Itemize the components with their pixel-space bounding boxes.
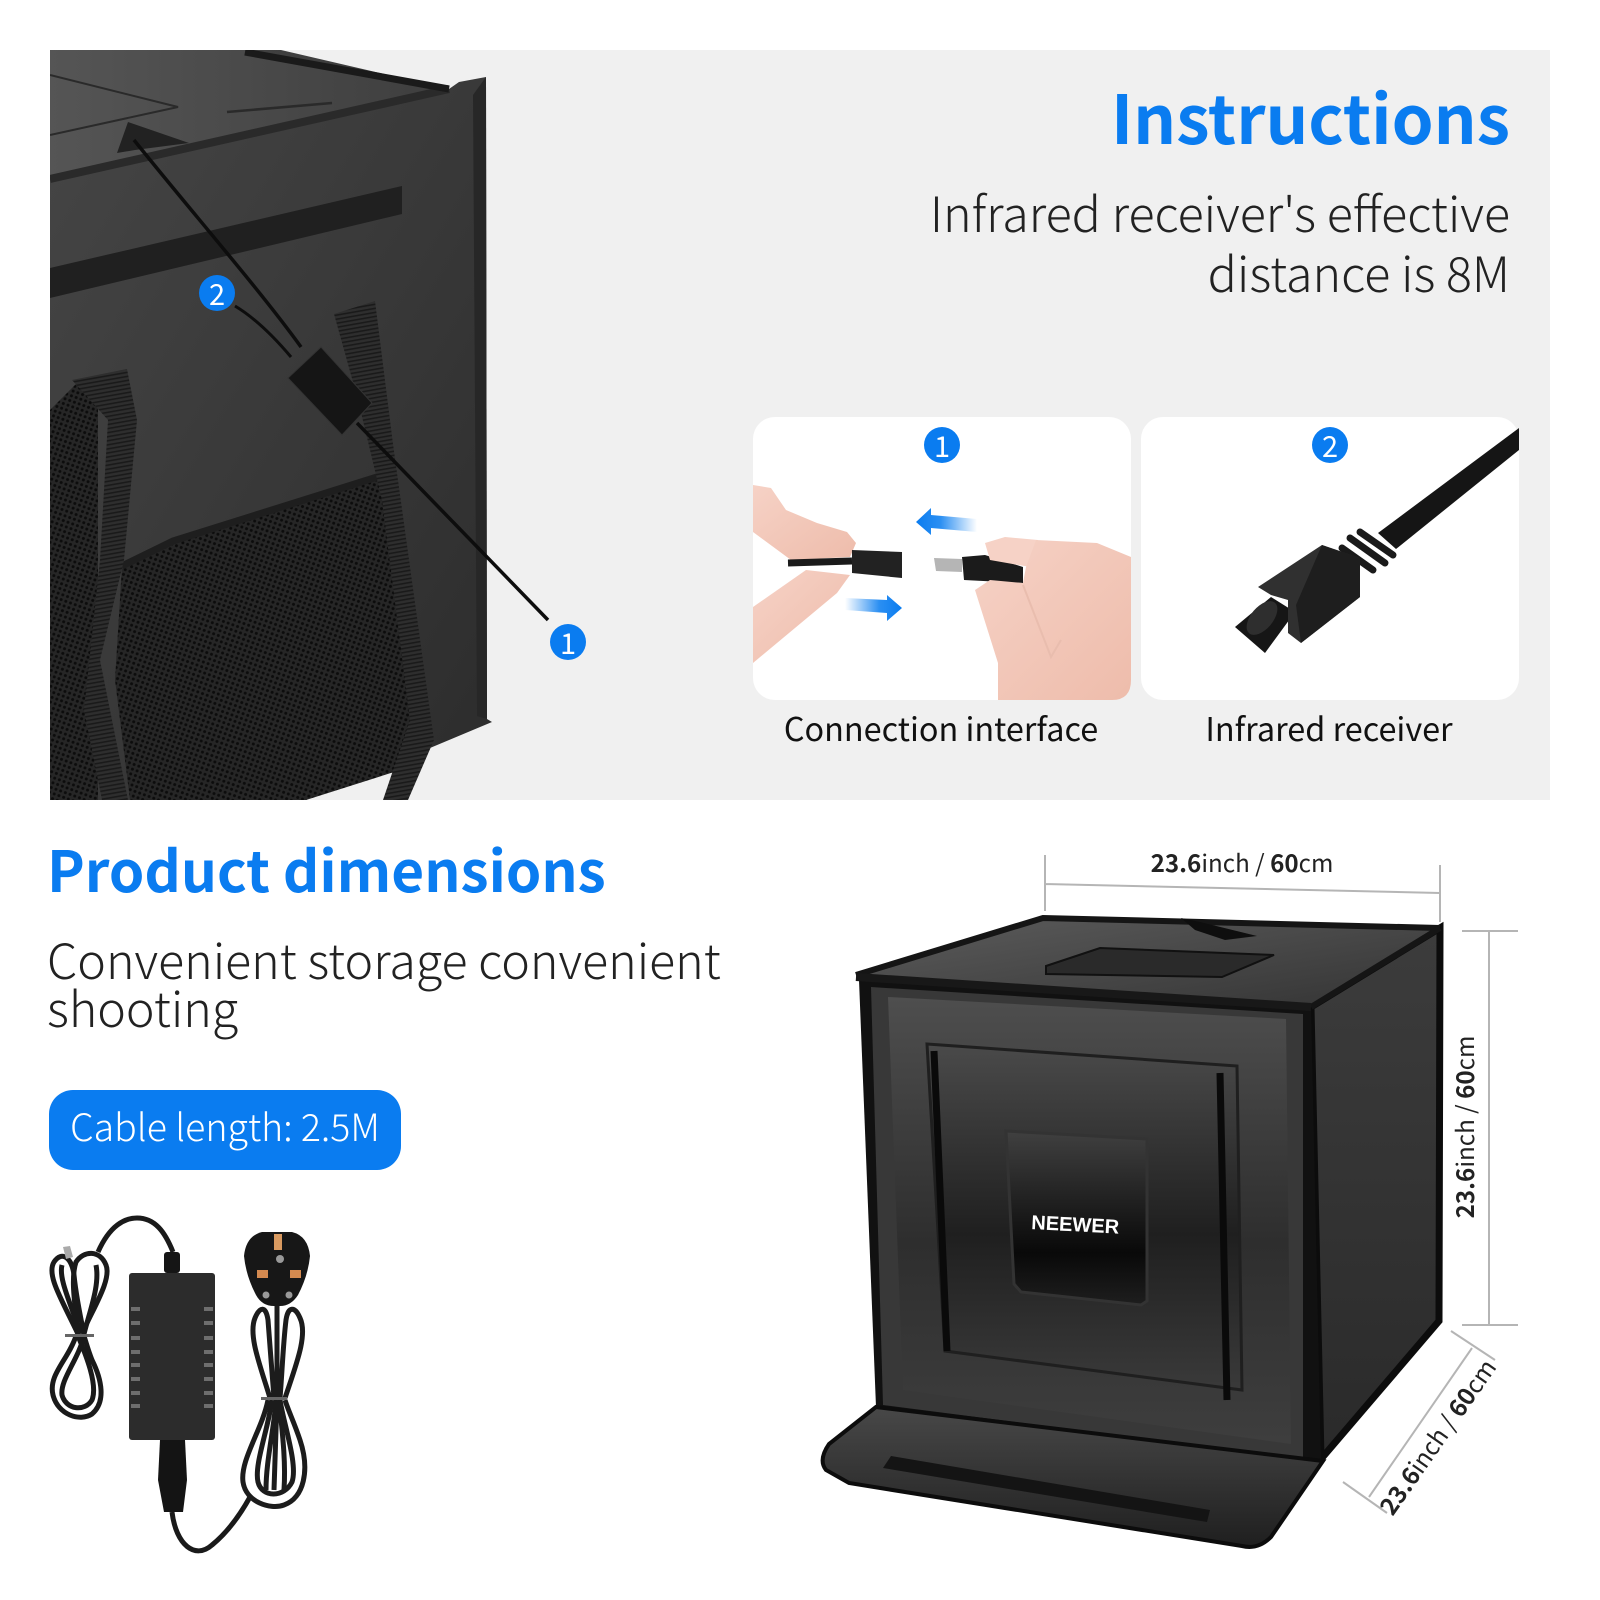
- marker 2 on photo: 2: [209, 272, 225, 314]
- arrow left: [916, 508, 977, 535]
- illustration: power adapter with plug: [52, 1218, 310, 1551]
- cable to infrared receiver: [134, 140, 548, 620]
- right hand: [975, 537, 1131, 700]
- brand logo: NEEWER: [1031, 1212, 1120, 1239]
- marker 1 on photo: [550, 621, 586, 663]
- power socket connector: [158, 1440, 187, 1512]
- photo: light box side with cable: [50, 50, 548, 800]
- strain relief: [164, 1252, 180, 1273]
- arrow right: [845, 595, 902, 621]
- receiver plug body: [1235, 545, 1360, 653]
- dc connector tip: [63, 1246, 73, 1259]
- cube top face: [856, 918, 1440, 1007]
- marker 2 on photo: [199, 272, 235, 314]
- badge: cable length: [49, 1090, 401, 1170]
- cube front face: [859, 980, 1321, 1464]
- left cable coil: [52, 1218, 173, 1417]
- left hand: [753, 485, 856, 663]
- marker 1: 1: [934, 424, 950, 466]
- heading: Product dimensions: Product dimensions: [47, 827, 606, 909]
- plug connector: [934, 555, 1023, 583]
- panel: instructions background: [50, 50, 1550, 800]
- plug cable tie: [261, 1397, 287, 1400]
- uk plug: [244, 1232, 310, 1306]
- cable junction box: [288, 347, 372, 435]
- front flap: [823, 1407, 1323, 1547]
- lower cable to plug: [172, 1497, 250, 1551]
- dimension: depth: 23.6inch / 60cm: [1370, 1351, 1503, 1521]
- dimension: width: [1045, 844, 1440, 922]
- illustration: folding light box: [823, 918, 1440, 1547]
- door panel: [927, 1044, 1242, 1390]
- text: convenient storage: Convenient storage convenient: [47, 923, 721, 993]
- left cable tie: [65, 1334, 94, 1337]
- marker 1 on photo: 1: [560, 621, 576, 663]
- marker 2: 2: [1322, 424, 1338, 466]
- dimension: height: 23.6inch / 60cm: [1446, 1036, 1481, 1218]
- marker 2: [1312, 424, 1348, 466]
- socket connector: [788, 550, 902, 578]
- adapter body: [129, 1273, 215, 1440]
- text: convenient storage: shooting: [47, 971, 238, 1041]
- caption: infrared receiver: Infrared receiver: [1205, 704, 1453, 751]
- dimension: height: [1446, 931, 1518, 1325]
- caption: connection interface: Connection interface: [784, 704, 1098, 751]
- zippers: [934, 1051, 1227, 1400]
- dimension: width: 23.6inch / 60cm: [1151, 844, 1333, 879]
- card: connection interface: [753, 417, 1131, 700]
- text: infrared receiver distance: [930, 176, 1510, 306]
- plug cable coil: [243, 1305, 305, 1506]
- window panel: [1006, 1131, 1147, 1305]
- badge: cable length: Cable length: 2.5M: [70, 1097, 380, 1152]
- text: infrared receiver distance: Infrared receiver's effective: [930, 176, 1510, 246]
- cube right face: [1311, 928, 1440, 1459]
- marker 1: [924, 424, 960, 466]
- receiver ribs: [1342, 532, 1393, 570]
- card: infrared receiver: [1141, 417, 1519, 700]
- heading: Instructions: Instructions: [1111, 67, 1510, 164]
- text: infrared receiver distance: distance is 8M: [1208, 236, 1510, 306]
- text: convenient storage: [47, 923, 721, 1041]
- receiver cable: [1378, 428, 1519, 549]
